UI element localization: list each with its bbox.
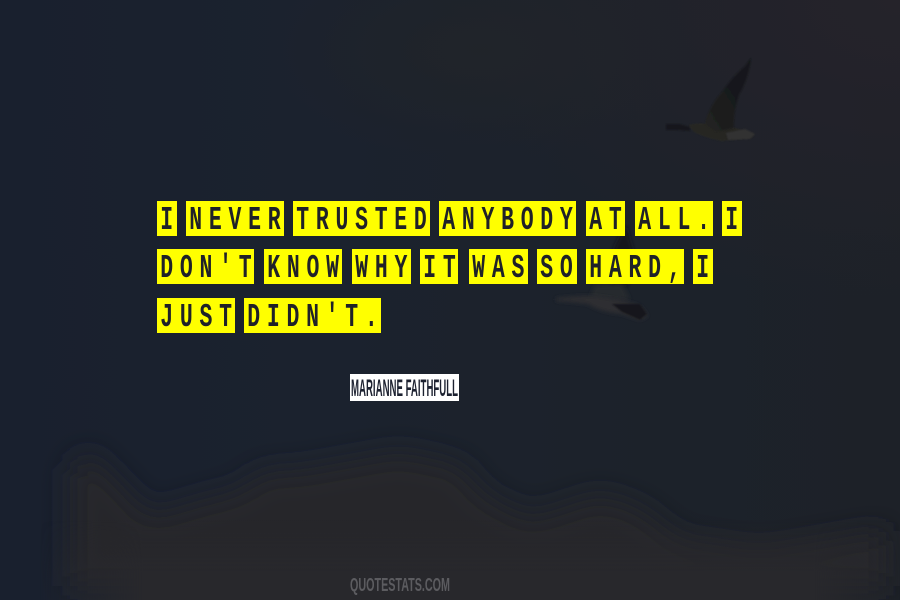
bird: upper goose	[666, 58, 755, 141]
word: I (line end): I	[696, 251, 716, 288]
watermark: QUOTESTATS.COM	[350, 575, 450, 595]
line 2	[157, 249, 716, 288]
word: AT: AT	[589, 203, 628, 240]
word: SO: SO	[540, 251, 579, 288]
word: I: I	[160, 203, 180, 240]
author label	[350, 374, 459, 402]
word: HARD,: HARD,	[589, 251, 687, 288]
word: DON'T: DON'T	[160, 251, 258, 288]
word: DIDN'T.: DIDN'T.	[247, 300, 384, 337]
line 1	[157, 201, 745, 240]
word: TRUSTED: TRUSTED	[296, 203, 433, 240]
word: ALL.: ALL.	[638, 203, 717, 240]
line 3	[157, 298, 384, 337]
word: IT: IT	[423, 251, 462, 288]
word: I (line end): I	[725, 203, 745, 240]
word: KNOW: KNOW	[267, 251, 346, 288]
word: WAS: WAS	[472, 251, 531, 288]
bird: lower goose	[556, 226, 648, 320]
word: ANYBODY: ANYBODY	[442, 203, 579, 240]
word: NEVER: NEVER	[189, 203, 287, 240]
text: MARIANNE FAITHFULL	[351, 375, 458, 402]
background: clouds	[70, 462, 878, 600]
word: WHY: WHY	[355, 251, 414, 288]
quote: yellow word highlights	[157, 201, 745, 337]
word: JUST: JUST	[160, 300, 239, 337]
